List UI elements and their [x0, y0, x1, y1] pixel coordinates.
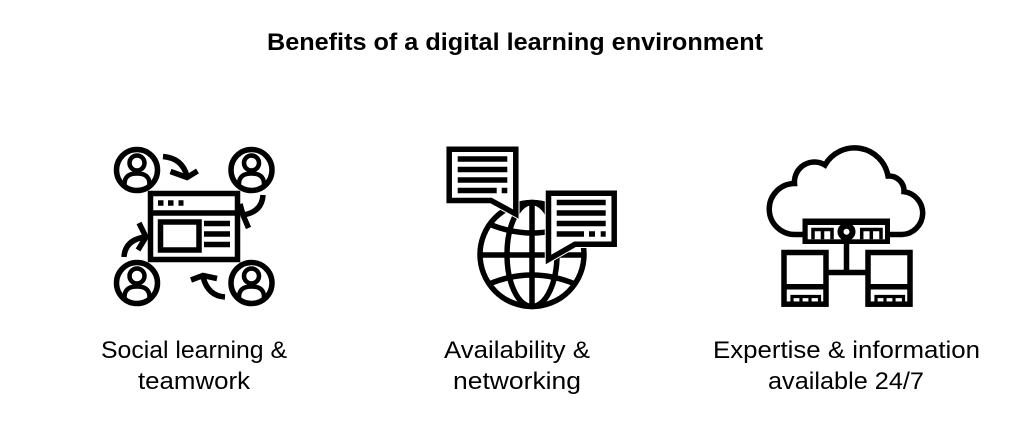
speech bubble right	[548, 193, 614, 260]
user bottom right	[231, 262, 272, 304]
cloud	[769, 148, 923, 235]
caption: social learning: Social learning &	[101, 337, 287, 364]
caption: expertise: available 24/7	[768, 368, 924, 395]
icon: cloud connected to servers	[769, 148, 923, 304]
user bottom left	[116, 262, 158, 304]
user top right	[231, 150, 272, 190]
arrow bottom left	[124, 223, 146, 257]
arrow bottom right	[191, 276, 225, 297]
title: Benefits of a digital learning environment	[267, 29, 763, 56]
server right	[868, 252, 910, 304]
memory module	[802, 218, 890, 244]
panel: availability and networking	[444, 149, 614, 395]
server left	[784, 252, 826, 304]
icon: globe with speech bubbles	[449, 149, 614, 306]
speech bubble left	[449, 149, 516, 214]
icon: collaboration around a shared window	[116, 150, 272, 304]
panel: expertise and information	[713, 148, 980, 395]
globe	[480, 202, 584, 306]
user top left	[116, 150, 158, 190]
browser window	[150, 194, 238, 260]
caption: social learning: teamwork	[138, 368, 251, 395]
caption: expertise: Expertise & information	[713, 337, 980, 364]
caption: availability: Availability &	[444, 337, 590, 364]
arrow top right	[240, 195, 263, 228]
caption: availability: networking	[453, 368, 581, 395]
arrow top left	[163, 156, 198, 178]
panel: social learning and teamwork	[101, 150, 287, 395]
network connector	[826, 244, 868, 272]
